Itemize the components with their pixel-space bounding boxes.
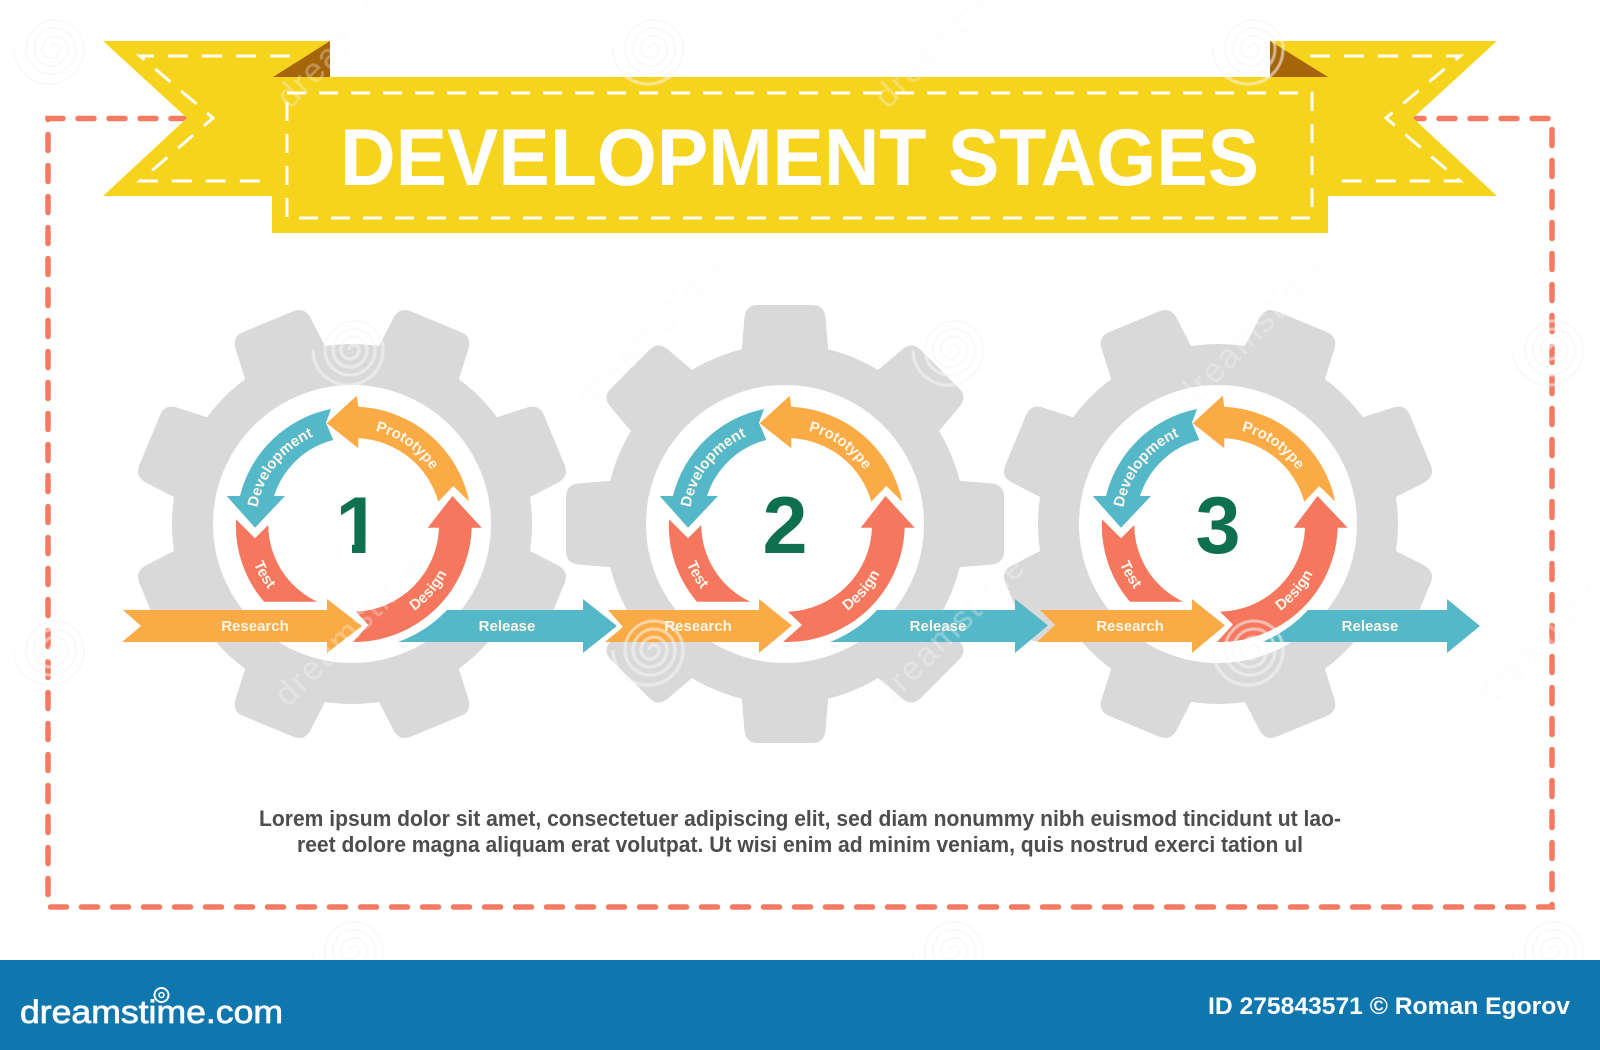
dashed border frame <box>48 118 1552 907</box>
design arrow <box>1217 496 1348 642</box>
stage 1 cycle <box>226 396 482 642</box>
release arrow 1 <box>398 599 617 653</box>
gear 3 <box>932 238 1504 810</box>
test arrow <box>236 519 318 602</box>
research arrow 1: Research <box>221 618 289 635</box>
release arrow 1: Release <box>479 618 535 635</box>
watermark pattern: dreamstime <box>267 547 433 714</box>
number 3: 3 <box>1195 481 1241 571</box>
number 1: 1 <box>335 481 381 571</box>
design arrow: Design <box>408 571 446 610</box>
gear 2 <box>566 305 1004 743</box>
release arrow 3 <box>1262 599 1480 653</box>
prototype arrow <box>1192 396 1336 502</box>
research arrow 2: Research <box>664 618 732 635</box>
body text: Lorem ipsum dolor sit amet, consectetuer adipiscing elit, sed diam nonummy nibh euismod tincidunt ut lao- <box>259 806 1341 831</box>
development arrow <box>660 409 766 528</box>
test arrow <box>668 519 750 602</box>
ribbon left fold <box>273 41 330 77</box>
gear 1 <box>66 238 638 810</box>
research arrow 2 <box>605 599 792 653</box>
ribbon left tail <box>103 41 330 196</box>
development arrow: Development <box>1113 428 1180 507</box>
prototype arrow: Prototype <box>1242 421 1302 469</box>
watermark pattern: dreamstime <box>1169 249 1335 416</box>
prototype arrow <box>760 396 902 502</box>
release arrow 3: Release <box>1342 618 1398 635</box>
prototype arrow <box>326 396 470 502</box>
image id and credit: ID 275843571 © Roman Egorov <box>1208 993 1571 1020</box>
watermark pattern: dreamstime <box>867 547 1033 714</box>
ribbon right tail <box>1270 41 1497 196</box>
research arrow 3: Research <box>1096 618 1164 635</box>
design arrow <box>783 496 915 642</box>
body text <box>259 806 1341 857</box>
footer bar <box>0 960 1600 1050</box>
design arrow: Design <box>842 571 880 610</box>
body text: reet dolore magna aliquam erat volutpat. Ut wisi enim ad minim veniam, quis nostrud exerci tation ul <box>297 832 1303 857</box>
ribbon stitching <box>140 56 1460 218</box>
release arrow 2: Release <box>910 618 966 635</box>
stage 3 cycle <box>1092 396 1348 642</box>
watermark pattern: dreamstime <box>569 249 735 416</box>
ribbon main band <box>272 77 1328 233</box>
ribbon right fold <box>1270 41 1328 77</box>
dreamstime logo: dreamstime.com <box>20 994 283 1030</box>
development arrow: Development <box>680 428 746 507</box>
stage 2 cycle <box>660 396 915 642</box>
title: DEVELOPMENT STAGES <box>340 113 1259 203</box>
development arrow: Development <box>247 428 314 507</box>
prototype arrow: Prototype <box>809 421 870 469</box>
test arrow: Test <box>688 560 708 590</box>
test arrow: Test <box>1121 560 1142 590</box>
release arrow 2 <box>830 599 1048 653</box>
development arrow <box>1092 409 1200 528</box>
test arrow: Test <box>255 560 276 590</box>
research arrow 3 <box>1037 599 1225 653</box>
design arrow <box>353 496 482 642</box>
development arrow <box>226 409 334 528</box>
number 2: 2 <box>762 481 808 571</box>
research arrow 1 <box>122 599 362 653</box>
test arrow <box>1102 519 1184 602</box>
ribbon banner <box>103 41 1497 233</box>
prototype arrow: Prototype <box>376 421 436 469</box>
design arrow: Design <box>1274 571 1312 610</box>
